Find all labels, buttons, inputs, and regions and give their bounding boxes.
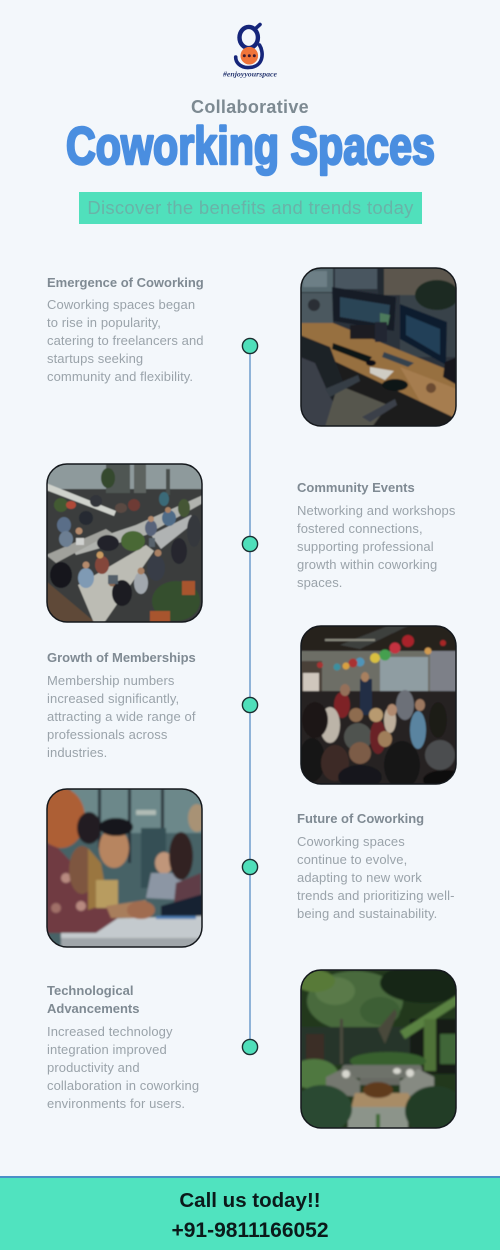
text block: Technological Advancements: Technological (47, 983, 133, 998)
text block: Technological Advancements: Increased technology (47, 1024, 173, 1039)
text block: Future of Coworking: Coworking spaces (297, 834, 405, 849)
footer: call to action: Call us today!! (179, 1189, 321, 1212)
photo: community event crowd (300, 625, 457, 785)
heading: Collaborative: Collaborative (191, 97, 309, 117)
timeline (242, 338, 258, 1056)
text block: Community Events: Networking and workshops (297, 503, 455, 518)
footer: call to action (0, 1176, 500, 1250)
text block: Growth of Memberships (47, 650, 196, 760)
logo: #enjoyyourspace (222, 72, 277, 78)
text block: Growth of Memberships: professionals across (47, 727, 168, 742)
subtitle banner: Discover the benefits and trends today (87, 197, 414, 218)
subtitle banner (79, 192, 422, 224)
text block: Growth of Memberships: increased significantly, (47, 691, 179, 706)
photo: busy open-plan office (46, 463, 203, 623)
photo: desk with monitors (300, 267, 457, 427)
text block: Future of Coworking: continue to evolve, (297, 852, 407, 867)
text block: Community Events: supporting professional (297, 539, 434, 554)
text block: Community Events (297, 480, 455, 590)
text block: Growth of Memberships: industries. (47, 745, 107, 760)
text block: Technological Advancements: environments for users. (47, 1096, 185, 1111)
text block: Community Events: spaces. (297, 575, 343, 590)
photo: outdoor garden lounge (300, 969, 457, 1129)
text block: Growth of Memberships: attracting a wide range of (47, 709, 196, 724)
text block: Future of Coworking: being and sustainability. (297, 906, 437, 921)
text block: Emergence of Coworking: to rise in popularity, (47, 315, 161, 330)
logo (222, 22, 277, 78)
text block: Technological Advancements (47, 983, 199, 1111)
text block: Emergence of Coworking (47, 275, 204, 384)
text block: Future of Coworking: trends and prioritizing well- (297, 888, 455, 903)
text block: Growth of Memberships: Membership numbers (47, 673, 175, 688)
text block: Growth of Memberships: Growth of Memberships (47, 650, 196, 665)
photo: team meeting around table (46, 788, 203, 948)
text block: Community Events: Community Events (297, 480, 415, 495)
text block: Community Events: fostered connections, (297, 521, 423, 536)
text block: Emergence of Coworking: startups seeking (47, 351, 143, 366)
text block: Emergence of Coworking: catering to freelancers and (47, 333, 204, 348)
text block: Technological Advancements: Advancements (47, 1001, 139, 1016)
text block: Future of Coworking: adapting to new work (297, 870, 422, 885)
text block: Future of Coworking: Future of Coworking (297, 811, 424, 826)
text block: Technological Advancements: integration improved (47, 1042, 167, 1057)
text block: Technological Advancements: collaboration in coworking (47, 1078, 199, 1093)
text block: Future of Coworking (297, 811, 455, 921)
footer: call to action: +91-9811166052 (171, 1219, 329, 1242)
text block: Technological Advancements: productivity and (47, 1060, 140, 1075)
text block: Community Events: growth within coworking (297, 557, 437, 572)
text block: Emergence of Coworking: community and flexibility. (47, 369, 193, 384)
text block: Emergence of Coworking: Coworking spaces began (47, 297, 195, 312)
text block: Emergence of Coworking: Emergence of Coworking (47, 275, 204, 290)
